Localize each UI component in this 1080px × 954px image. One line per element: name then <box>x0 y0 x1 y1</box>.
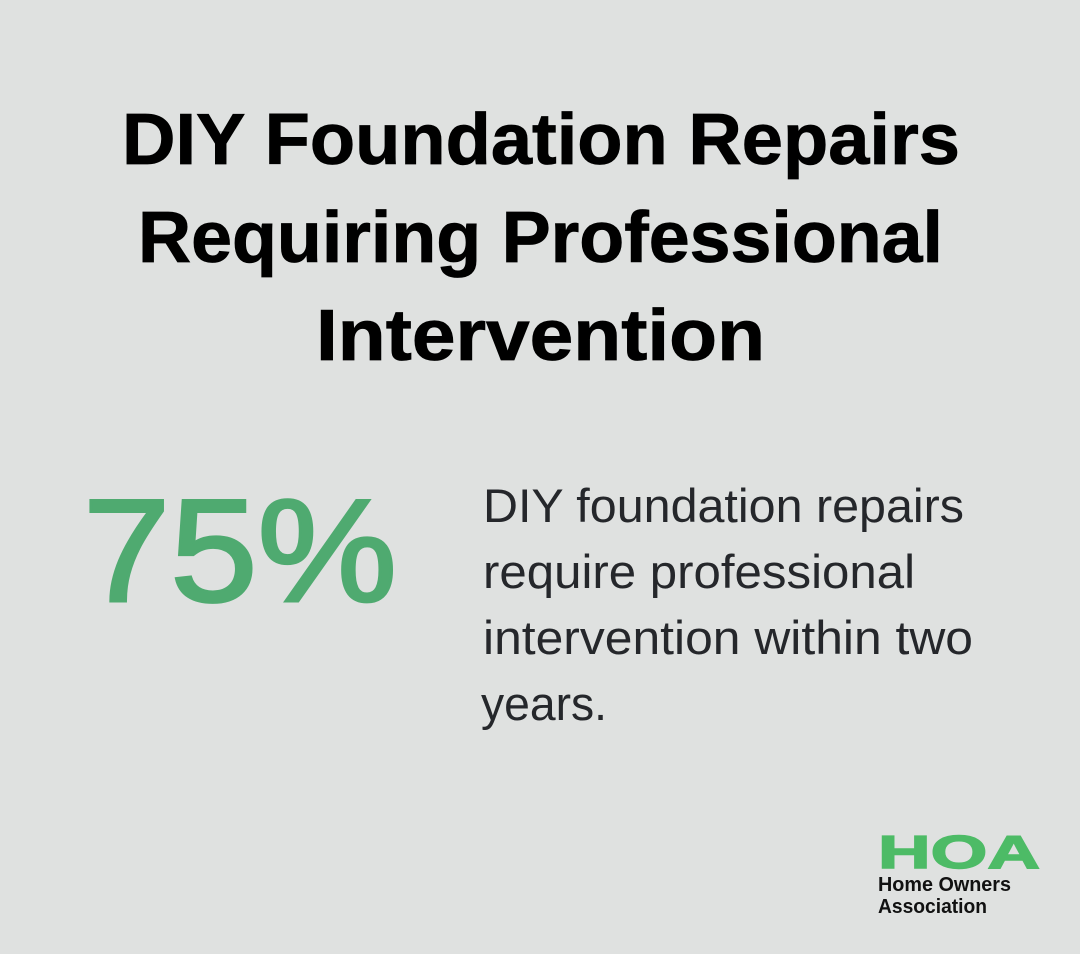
title: Requiring Professional <box>138 198 943 278</box>
logo name: Home Owners <box>878 874 1011 896</box>
logo name: Association <box>878 896 987 918</box>
logo mark: HOA <box>878 826 1040 878</box>
title <box>122 100 960 376</box>
statistic description: require professional <box>483 545 915 598</box>
big statistic: 75%: 75% <box>83 469 397 632</box>
title: DIY Foundation Repairs <box>122 100 960 180</box>
statistic description: years. <box>481 677 607 730</box>
logo: HOA Home Owners Association <box>878 826 1040 918</box>
title: Intervention <box>316 296 765 376</box>
statistic description: DIY foundation repairs <box>483 479 964 532</box>
statistic description: intervention within two <box>483 611 973 664</box>
statistic description <box>481 479 973 730</box>
logo name <box>878 874 1011 918</box>
